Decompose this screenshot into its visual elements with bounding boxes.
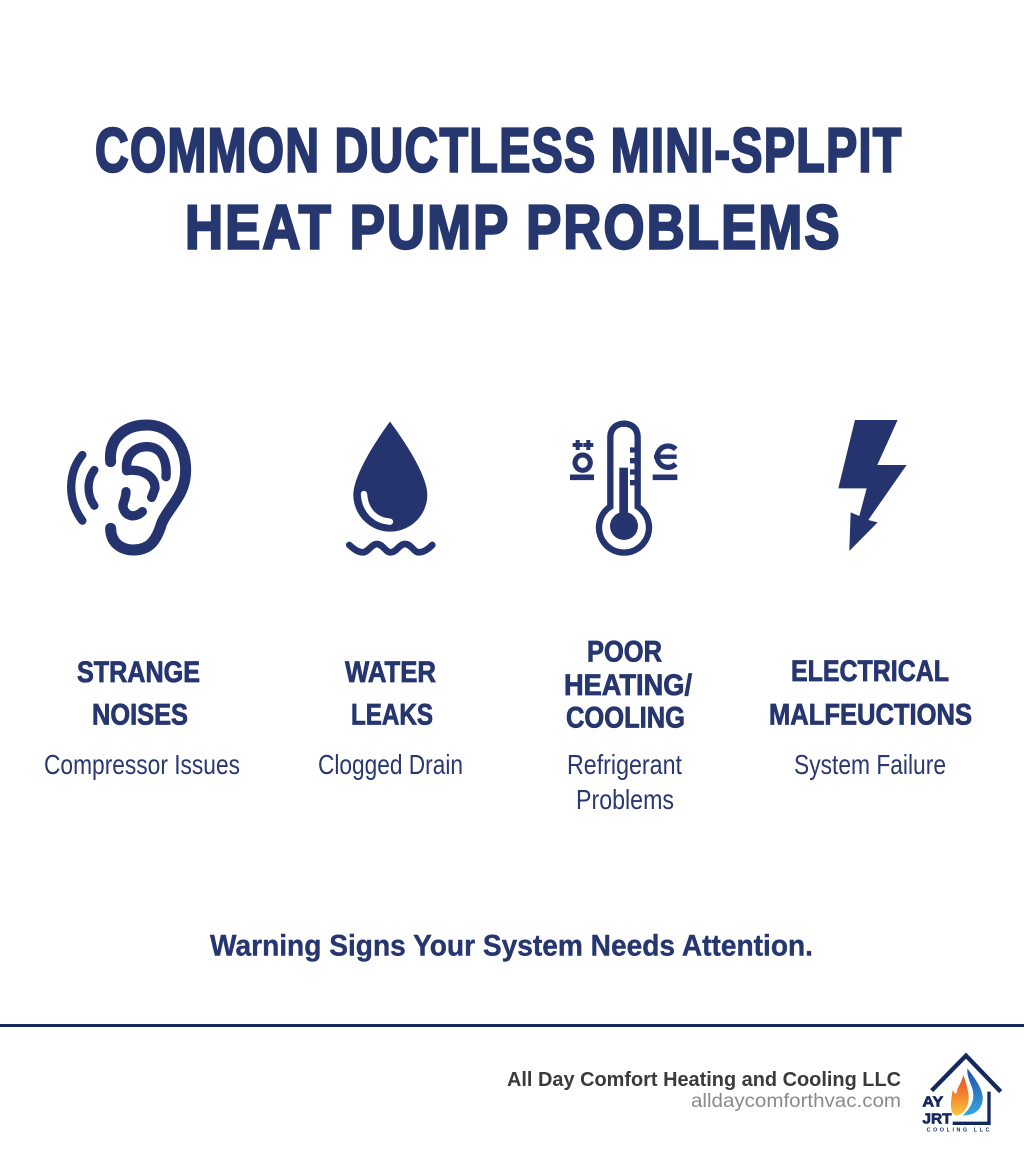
label: water leaks	[318, 656, 463, 780]
title	[95, 115, 901, 263]
title: COMMON DUCTLESS MINI-SPLPIT	[95, 115, 901, 185]
label: water leaks: WATER	[345, 656, 436, 689]
label: poor heating/cooling: Refrigerant	[567, 749, 682, 780]
label: electrical malfunctions: ELECTRICAL	[791, 655, 949, 688]
label: strange noises: NOISES	[92, 698, 188, 732]
icon: thermometer	[570, 424, 677, 553]
footer company name: All Day Comfort Heating and Cooling LLC	[507, 1069, 901, 1091]
label: electrical malfunctions: System Failure	[794, 749, 946, 780]
title: HEAT PUMP PROBLEMS	[185, 194, 840, 263]
warning statement: Warning Signs Your System Needs Attention.	[210, 930, 813, 962]
label: water leaks: LEAKS	[351, 698, 433, 732]
logo: AY	[922, 1094, 944, 1110]
label: poor heating/cooling	[564, 636, 693, 815]
logo: COOLING LLC	[927, 1128, 989, 1134]
label: strange noises	[44, 656, 240, 780]
logo	[922, 1056, 1001, 1134]
label: water leaks: Clogged Drain	[318, 749, 463, 780]
label: poor heating/cooling: HEATING/	[564, 669, 693, 702]
logo: JRT	[922, 1111, 952, 1127]
label: strange noises: Compressor Issues	[44, 749, 240, 780]
label: poor heating/cooling: POOR	[587, 636, 662, 668]
icon: lightning bolt	[838, 420, 907, 551]
label: strange noises: STRANGE	[77, 656, 200, 689]
footer website: alldaycomforthvac.com	[691, 1091, 901, 1112]
icon: ear with sound waves	[71, 425, 186, 550]
label: electrical malfunctions	[769, 655, 972, 780]
label: electrical malfunctions: MALFEUCTIONS	[769, 698, 972, 732]
icon: water drop	[349, 422, 432, 552]
label: poor heating/cooling: Problems	[576, 784, 674, 815]
label: poor heating/cooling: COOLING	[566, 702, 685, 734]
